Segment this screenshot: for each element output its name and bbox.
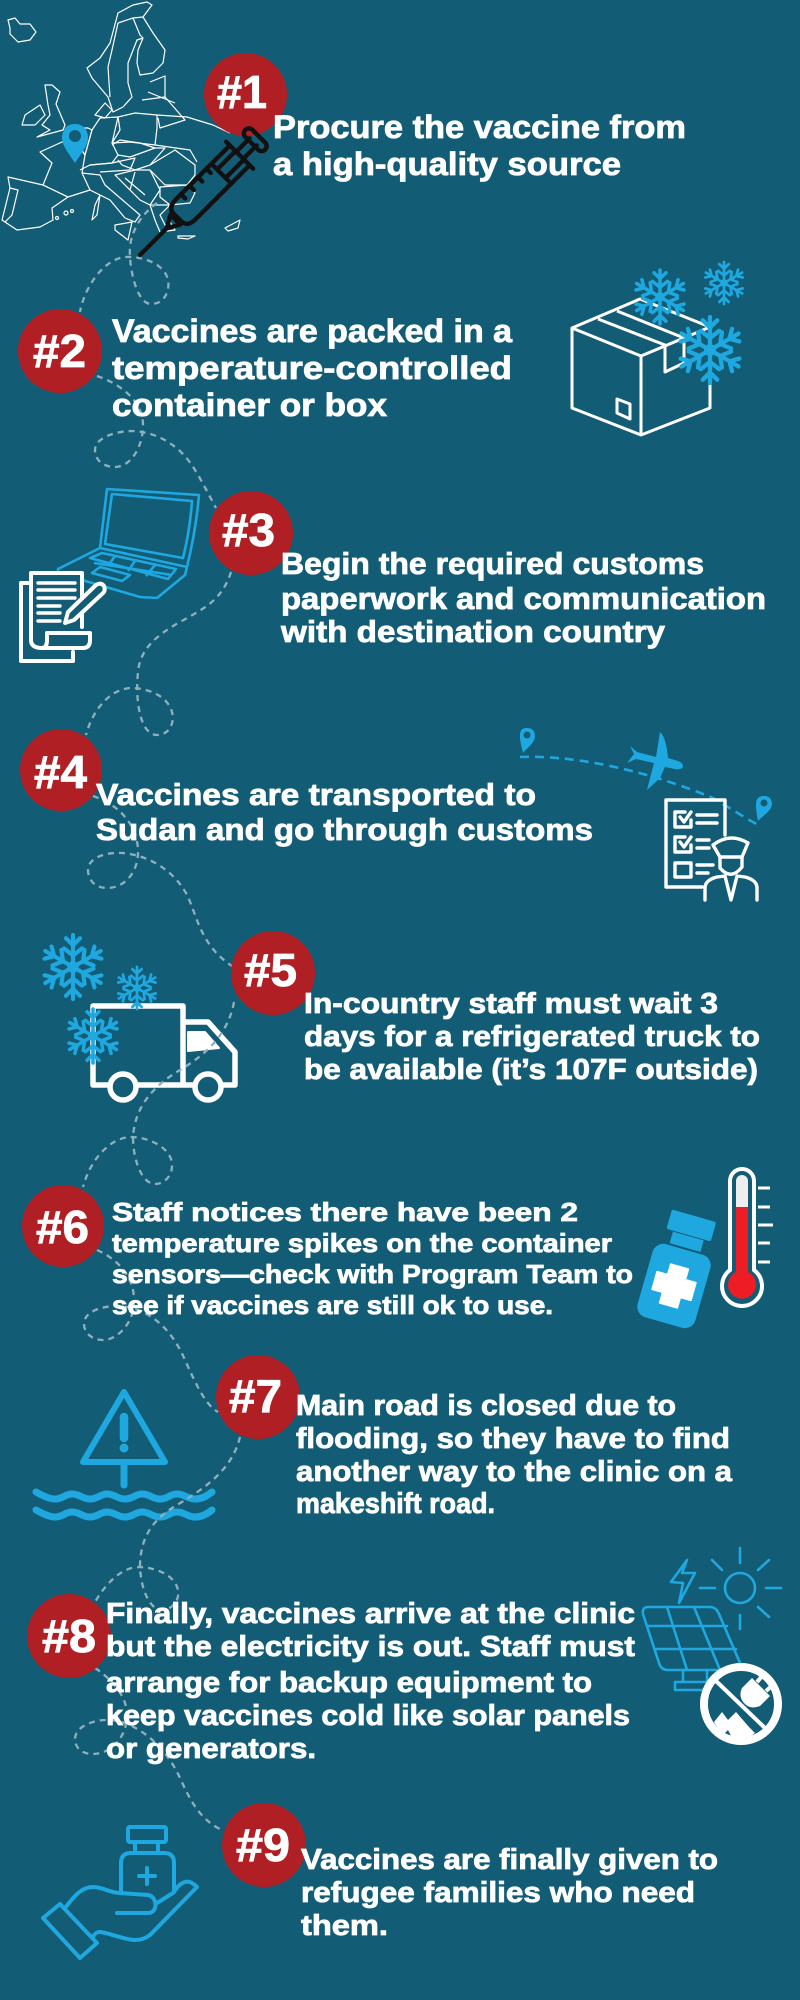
step 7 badge: #7 [229,1370,282,1422]
step 2 badge [18,309,102,393]
dashed route [75,203,240,1830]
step 7 text: flooding, so they have to find [296,1423,730,1455]
step 2 text [112,313,512,423]
step 3 badge [209,491,293,575]
icon: thermometer [722,1169,773,1306]
step 7 text: Main road is closed due to [296,1390,676,1422]
step 8 text: keep vaccines cold like solar panels [106,1700,630,1732]
step 4 badge: #4 [34,746,87,798]
icon: snowflakes on truck [41,935,158,1063]
icon: flood warning sign [36,1392,212,1517]
step 7 text: another way to the clinic on a [296,1456,733,1488]
step 3 badge: #3 [222,504,275,556]
step 9 badge: #9 [236,1819,290,1871]
step 5 badge [231,931,315,1015]
step 9 text: Vaccines are finally given to [301,1844,718,1876]
step 4 badge [20,729,102,811]
step 5 text: days for a refrigerated truck to [304,1021,760,1053]
step 3 text [280,546,766,649]
step 8 badge: #8 [42,1610,96,1662]
step 9 text: refugee families who need [301,1877,695,1909]
step 2 badge: #2 [33,325,86,377]
icon: map of Europe [2,2,240,240]
step 8 text: Finally, vaccines arrive at the clinic [106,1598,635,1630]
step 7 badge [216,1355,300,1439]
step 5 text: In-country staff must wait 3 [304,988,718,1020]
icon: snowflakes on box [633,262,745,383]
step 7 text: makeshift road. [296,1488,495,1520]
step 2 text: temperature-controlled [112,350,512,386]
step 8 badge [27,1594,111,1678]
step 8 text: arrange for backup equipment to [106,1667,592,1699]
step 1 text [273,109,686,182]
step 3 text: Begin the required customs [281,546,704,581]
step 1 badge: #1 [217,66,267,118]
step 8 text [106,1598,636,1765]
icon: syringe [127,123,272,268]
step 1 text: Procure the vaccine from [273,109,686,145]
icon: refrigerated truck [93,1006,235,1100]
icon: no electricity symbol [704,1667,778,1741]
icon: flight path with pins [520,728,772,826]
step 4 text: Sudan and go through customs [96,812,593,847]
step 3 text: with destination country [280,614,666,649]
step 6 badge [22,1185,104,1267]
step 6 text [112,1197,633,1320]
step 3 text: paperwork and communication [281,581,766,616]
icon: map pin [62,124,88,163]
step 8 text: but the electricity is out. Staff must [106,1631,636,1663]
step 6 text: see if vaccines are still ok to use. [112,1290,553,1320]
step 2 text: container or box [112,387,387,423]
icon: solar panel and sun [643,1548,781,1690]
step 2 text: Vaccines are packed in a [112,313,512,349]
step 6 text: temperature spikes on the container [112,1228,612,1258]
icon: paperwork [21,573,105,661]
step 5 text: be available (it’s 107F outside) [304,1054,758,1086]
step 9 text: them. [301,1910,388,1942]
step 4 text: Vaccines are transported to [96,777,536,812]
icon: vaccine vial [635,1208,723,1331]
step 4 text [96,777,593,847]
step 9 text [301,1844,718,1942]
icon: packed box [572,299,710,435]
step 5 badge: #5 [244,944,297,996]
step 1 text: a high-quality source [273,146,621,182]
step 5 text [304,988,760,1086]
icon: hand holding vial [43,1827,197,1958]
step 1 badge [204,53,287,136]
step 8 text: or generators. [106,1733,316,1765]
step 7 text [296,1390,733,1520]
step 6 text: Staff notices there have been 2 [112,1197,578,1227]
icon: laptop [58,489,199,598]
step 6 badge: #6 [36,1201,89,1253]
icon: customs checklist and officer [666,800,757,900]
step 9 badge [222,1803,306,1887]
step 6 text: sensors—check with Program Team to [112,1259,633,1289]
